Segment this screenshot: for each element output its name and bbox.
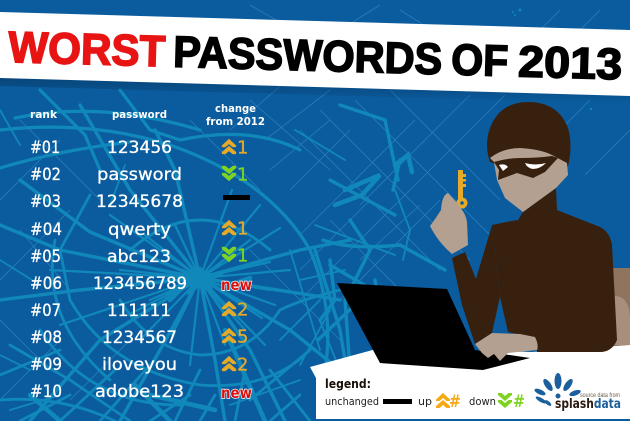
rank column: #01 [30,138,60,158]
thief arm [452,225,500,344]
table column headers: from 2012 [206,115,265,128]
change: up 1 [222,218,248,240]
title word: 2013: 2013 [518,37,623,89]
password column: password [97,165,182,185]
raised hand [430,193,468,254]
password column: 111111 [107,301,171,321]
thief mask [494,156,558,180]
white table and legend panel [310,345,630,419]
thief figure [430,102,617,352]
laptop [337,283,530,370]
thief eyes [499,163,546,171]
rank column: #06 [30,274,62,294]
legend: unchanged [325,396,412,408]
change: up 2 [222,354,248,376]
legend: unchanged: unchanged [325,396,379,408]
change: up 1: 1 [237,218,248,240]
legend [325,377,525,412]
legend: up: # [449,392,461,412]
thief face [490,148,568,212]
legend: up [418,392,461,412]
chair [605,268,630,350]
chair highlight [612,296,630,345]
title banner [0,12,630,96]
rank column: #02 [30,165,61,185]
title word: passwords: PASSWORDS [173,28,443,84]
legend: down: down [469,396,496,408]
change: down 1 [222,164,248,186]
banner shadow [0,76,630,104]
change column [221,138,252,402]
password column: iloveyou [102,355,177,375]
change: up 2: 2 [237,354,248,376]
table column headers: rank [30,108,58,121]
table column headers: password [112,108,167,121]
password column [93,138,187,402]
password column: 123456789 [93,274,187,294]
change: down 1: 1 [237,246,248,266]
rank column [30,138,62,402]
logo wordmark: splashdata [555,397,621,412]
table column headers [30,102,265,128]
change: down 1: 1 [237,164,248,186]
password column: 12345678 [96,192,183,212]
legend title: legend: [325,377,371,391]
legend: down: # [513,392,525,412]
rank column: #04 [30,220,62,240]
password column: abc123 [107,247,171,267]
change: new: new [221,384,252,402]
password column: 1234567 [102,328,177,348]
change: unchanged [223,195,250,200]
lower hand [475,333,538,361]
title word: of: OF [451,36,509,86]
password column: adobe123 [95,382,184,402]
password column: qwerty [108,220,171,240]
title word: worst: WORST [8,23,166,76]
password column: 123456 [107,138,172,158]
rank column: #03 [30,192,61,212]
change: up 2 [222,300,248,320]
change: up 5 [222,326,248,348]
change: down 1 [222,246,248,266]
thief head [487,102,570,175]
change: up 5: 5 [237,326,248,348]
change: up 2: 2 [237,300,248,320]
logo splash icon [534,373,581,407]
change: up 1: 1 [237,138,248,158]
change: new: new [221,276,252,294]
legend: up: up [418,396,432,408]
rank column: #08 [30,328,62,348]
change: up 1 [222,138,248,158]
rank column: #05 [30,247,61,267]
legend: down [469,392,525,412]
key [456,170,468,208]
table column headers: change [215,102,256,115]
splashdata logo [534,373,621,412]
rank column: #09 [30,355,62,375]
thief torso [492,188,617,352]
rank column: #10 [30,382,62,402]
logo source note: source data from [580,393,620,399]
crack burst centre [172,266,224,298]
rank column: #07 [30,301,61,321]
